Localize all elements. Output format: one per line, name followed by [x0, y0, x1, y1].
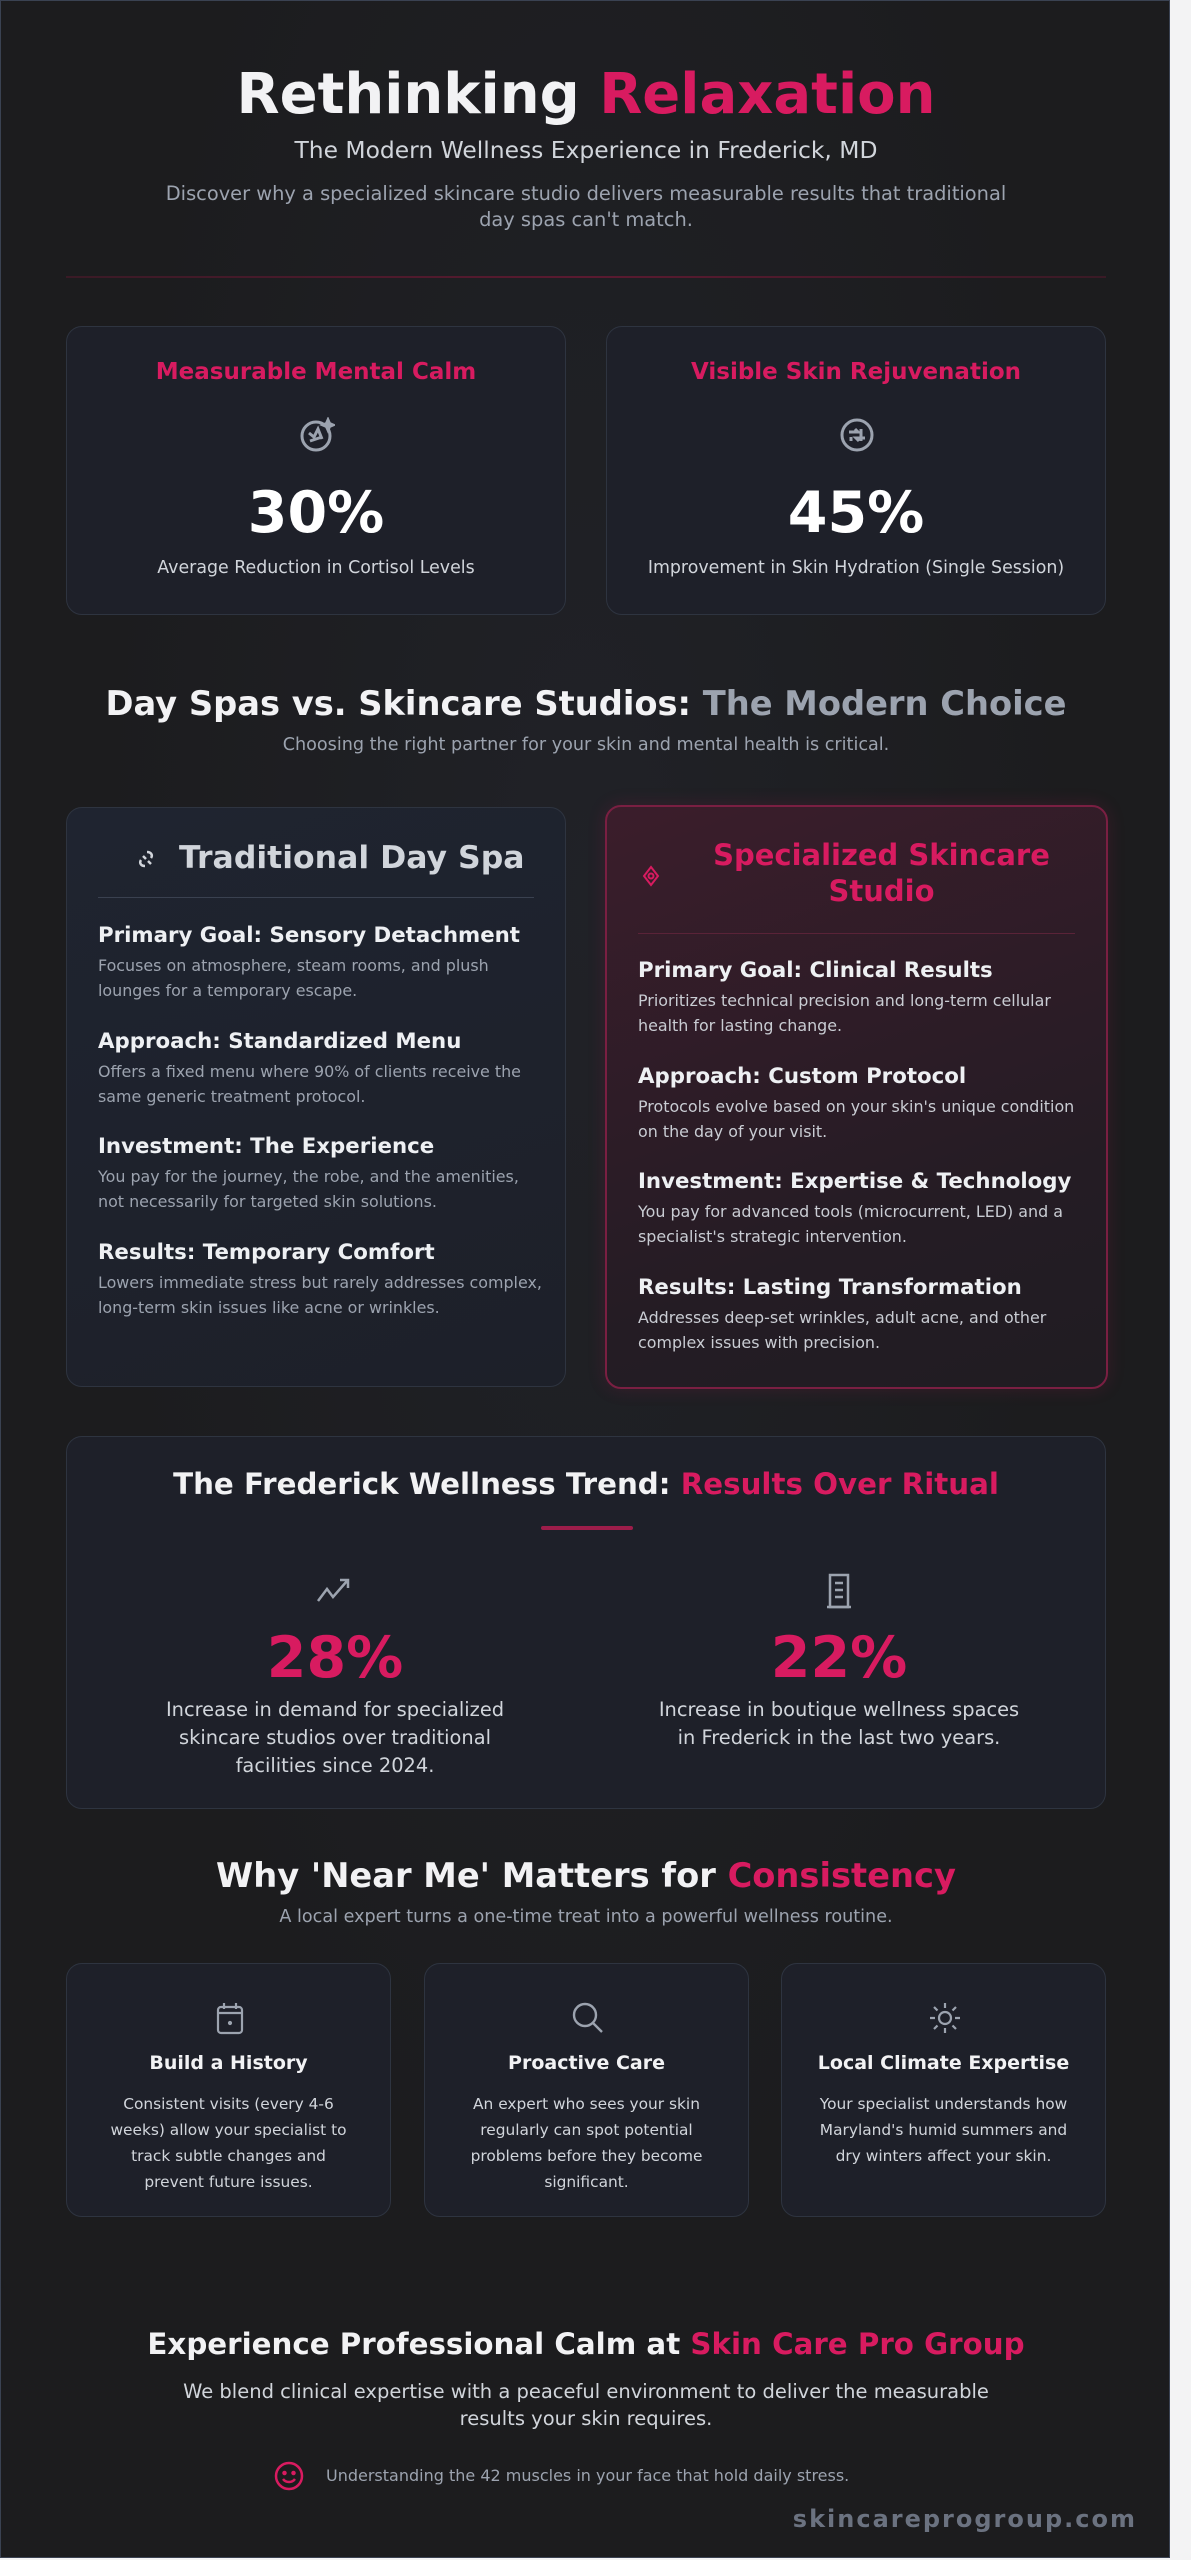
- panel: local climate: [781, 1963, 1106, 2217]
- icon: refresh face: [840, 418, 874, 452]
- panel: specialized skincare studio: complex issues with precision.: [638, 1333, 880, 1352]
- panel: traditional day spa: Lowers immediate stress but rarely addresses complex,: [98, 1273, 542, 1292]
- section subtitle: Choosing the right partner for your skin and mental health is critical.: [283, 735, 889, 755]
- stat: boutique spaces: Increase in boutique wellness spaces: [659, 1698, 1019, 1721]
- panel: specialized skincare studio: Protocols evolve based on your skin's unique condition: [638, 1097, 1074, 1116]
- item: investment: Investment: Expertise & Technology: [638, 1169, 1071, 1194]
- icon: calendar: [216, 2003, 244, 2034]
- panel: local climate: Your specialist understands how: [820, 2095, 1067, 2113]
- panel: local climate: dry winters affect your skin.: [836, 2147, 1051, 2165]
- panel: specialized skincare studio: health for lasting change.: [638, 1016, 842, 1035]
- footer url: skincareprogroup.com: [793, 2505, 1137, 2533]
- item: approach: Approach: Custom Protocol: [638, 1064, 966, 1089]
- panel: build a history: track subtle changes and: [131, 2147, 326, 2165]
- number: 30%: [248, 480, 384, 546]
- panel: traditional day spa: same generic treatment protocol.: [98, 1087, 365, 1106]
- stat: demand: Increase in demand for specialized: [166, 1698, 504, 1721]
- panel: build a history: prevent future issues.: [144, 2173, 313, 2191]
- stat: boutique spaces: [659, 1574, 1019, 1749]
- heading: Visible Skin Rejuvenation: [691, 359, 1021, 385]
- fact line with smiley icon: Understanding the 42 muscles in your face that hold daily stress.: [326, 2466, 849, 2485]
- subtitle: The Modern Wellness Experience in Frederick, MD: [294, 136, 878, 164]
- section heading: near me: Why 'Near Me' Matters for Consistency: [216, 1856, 956, 1895]
- panel: build a history: [66, 1963, 391, 2217]
- stat: boutique spaces: in Frederick in the last two years.: [678, 1726, 1000, 1749]
- section heading: comparison: Day Spas vs. Skincare Studios: The Modern Choice: [106, 684, 1066, 723]
- panel: build a history: Consistent visits (every 4-6: [123, 2095, 334, 2113]
- item: results: Results: Temporary Comfort: [98, 1240, 435, 1265]
- header: Traditional Day Spa: [179, 840, 525, 876]
- panel: frederick wellness trend: [66, 1436, 1106, 1809]
- panel: specialized skincare studio: Addresses deep-set wrinkles, adult acne, and other: [638, 1308, 1046, 1327]
- panel: traditional day spa: not necessarily for targeted skin solutions.: [98, 1192, 437, 1211]
- icon: trend arrow: [317, 1578, 350, 1602]
- panel: specialized skincare studio: on the day of your visit.: [638, 1122, 827, 1141]
- icon: magnifier: [572, 2002, 603, 2033]
- item: approach: Approach: Standardized Menu: [98, 1029, 461, 1054]
- item: primary goal: Primary Goal: Sensory Detachment: [98, 923, 520, 948]
- panel: proactive care: significant.: [544, 2173, 629, 2191]
- panel: mental calm stat: [66, 326, 566, 615]
- stat: boutique spaces: 22%: [771, 1625, 907, 1691]
- panel: specialized skincare studio: You pay for advanced tools (microcurrent, LED) and a: [638, 1202, 1063, 1221]
- stat: demand: [166, 1578, 504, 1777]
- closing heading: Experience Professional Calm at Skin Care Pro Group: [147, 2327, 1025, 2361]
- icon: sun: [930, 2003, 960, 2033]
- panel: skin rejuvenation stat: [606, 326, 1106, 615]
- closing paragraph: We blend clinical expertise with a peaceful environment to deliver the measurable: [183, 2380, 989, 2403]
- icon: target: [642, 866, 660, 886]
- panel: traditional day spa: You pay for the journey, the robe, and the amenities,: [98, 1167, 519, 1186]
- panel: proactive care: Proactive Care: [508, 2052, 665, 2074]
- panel: local climate: Maryland's humid summers and: [820, 2121, 1067, 2139]
- stat: demand: 28%: [267, 1625, 403, 1691]
- section subtitle: A local expert turns a one-time treat into a powerful wellness routine.: [279, 1907, 893, 1927]
- item: results: Results: Lasting Transformation: [638, 1275, 1022, 1300]
- caption: Improvement in Skin Hydration (Single Session): [648, 558, 1064, 578]
- panel: specialized skincare studio: [605, 805, 1108, 1389]
- panel: proactive care: regularly can spot potential: [480, 2121, 693, 2139]
- closing paragraph: [183, 2380, 989, 2430]
- icon: spa swirl: [138, 850, 154, 868]
- panel: proactive care: An expert who sees your skin: [473, 2095, 700, 2113]
- icon: building: [827, 1574, 851, 1608]
- item: investment: Investment: The Experience: [98, 1134, 434, 1159]
- fact line with smiley icon: [274, 2462, 849, 2490]
- panel: specialized skincare studio: Prioritizes technical precision and long-term cellular: [638, 991, 1051, 1010]
- closing paragraph: results your skin requires.: [460, 2407, 712, 2430]
- panel: traditional day spa: Offers a fixed menu where 90% of clients receive the: [98, 1062, 521, 1081]
- icon: calm face: [300, 417, 335, 452]
- panel: traditional day spa: long-term skin issues like acne or wrinkles.: [98, 1298, 440, 1317]
- caption: Average Reduction in Cortisol Levels: [157, 558, 475, 578]
- panel: traditional day spa: Focuses on atmosphere, steam rooms, and plush: [98, 956, 489, 975]
- number: 45%: [788, 480, 924, 546]
- panel: local climate: Local Climate Expertise: [818, 2052, 1069, 2074]
- panel: proactive care: [424, 1963, 749, 2217]
- panel: traditional day spa: lounges for a temporary escape.: [98, 981, 357, 1000]
- stat: demand: skincare studios over traditional: [179, 1726, 491, 1749]
- intro text: Discover why a specialized skincare studio delivers measurable results that traditional: [166, 182, 1006, 205]
- panel: build a history: Build a History: [149, 2052, 308, 2074]
- stat: demand: facilities since 2024.: [236, 1754, 434, 1777]
- icon: smiley: [274, 2462, 304, 2490]
- heading: Measurable Mental Calm: [156, 359, 476, 385]
- panel: proactive care: problems before they become: [471, 2147, 702, 2165]
- header: Specialized Skincare Studio: [713, 838, 1050, 908]
- intro text: [166, 182, 1006, 231]
- panel: build a history: weeks) allow your specialist to: [110, 2121, 347, 2139]
- item: primary goal: Primary Goal: Clinical Results: [638, 958, 993, 983]
- heading: The Frederick Wellness Trend: Results Over Ritual: [173, 1467, 999, 1501]
- intro text: day spas can't match.: [479, 208, 693, 231]
- panel: specialized skincare studio: specialist's strategic intervention.: [638, 1227, 907, 1246]
- panel: traditional day spa: [66, 807, 566, 1387]
- title: Rethinking Relaxation: [236, 62, 936, 127]
